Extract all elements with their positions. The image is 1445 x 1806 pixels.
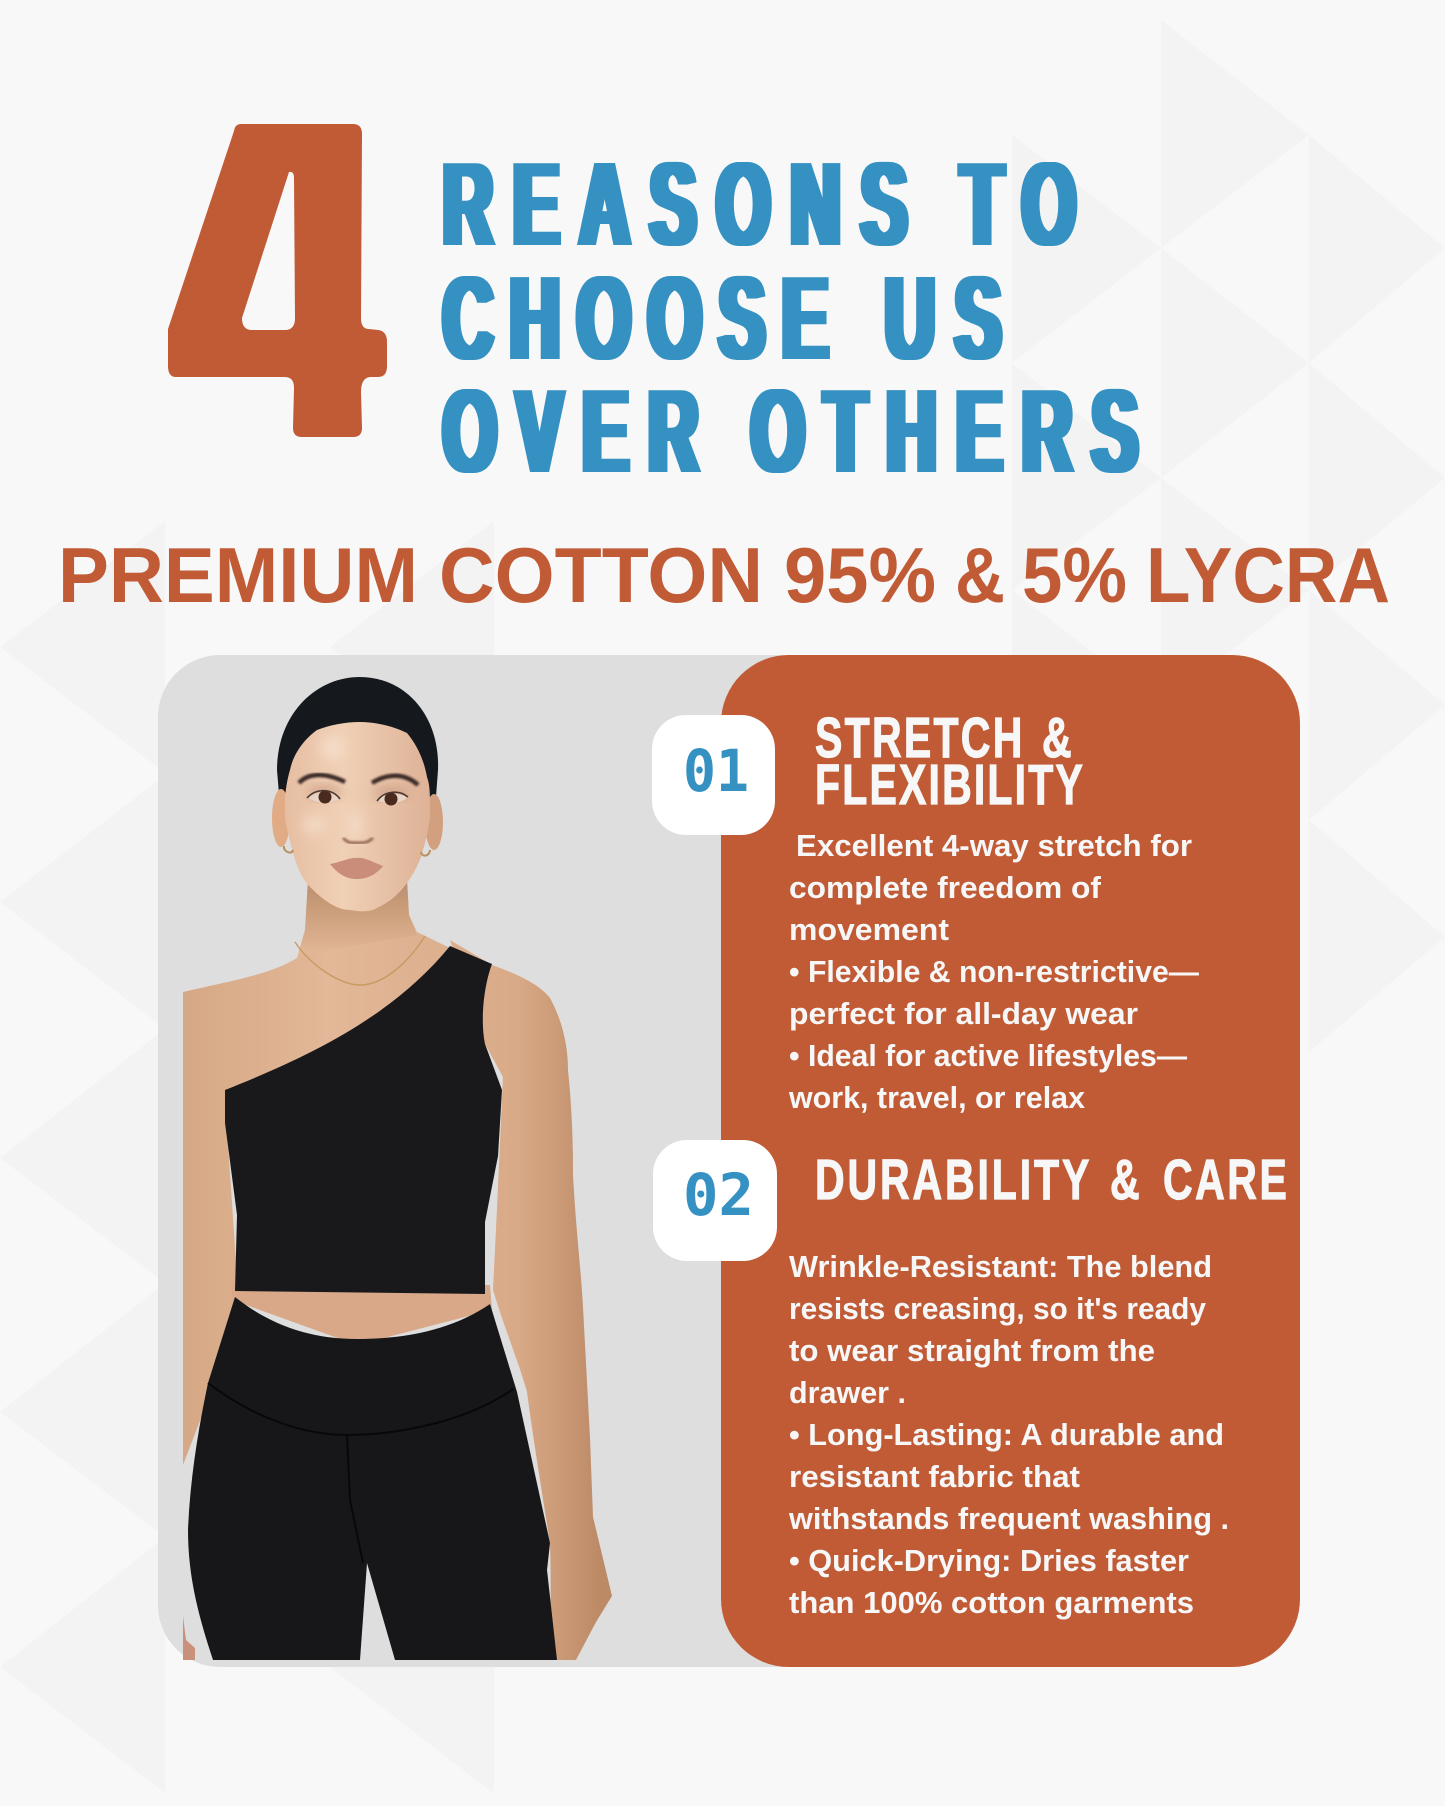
necklace xyxy=(295,936,425,985)
badge 02: 02 xyxy=(683,1161,754,1229)
subtitle: 95% xyxy=(784,531,936,619)
body text: stretch: perfect for all-day wear xyxy=(789,996,1138,1031)
heading: durability and care: & xyxy=(1110,1147,1140,1212)
title: OVER xyxy=(443,364,698,498)
right arm and hand xyxy=(450,940,612,1660)
badge 01: 01 xyxy=(683,737,749,805)
small hand at lower left xyxy=(183,1616,195,1660)
heading: stretch and flexibility: & xyxy=(1042,705,1072,770)
body text: durability: to wear straight from the xyxy=(789,1333,1155,1368)
heading: stretch and flexibility: STRETCH xyxy=(815,705,1022,770)
heading: stretch and flexibility xyxy=(815,705,1083,817)
eyebrows xyxy=(299,775,418,785)
body text: stretch: • Ideal for active lifestyles— xyxy=(789,1038,1187,1073)
body text: durability: drawer . xyxy=(789,1375,906,1410)
left ear xyxy=(272,789,290,847)
model photo illustration xyxy=(183,677,612,1660)
eyes xyxy=(307,790,408,806)
body text: durability: • Long-Lasting: A durable and xyxy=(789,1417,1224,1452)
title xyxy=(443,137,1138,498)
hair xyxy=(277,677,438,810)
subtitle: COTTON xyxy=(439,531,763,619)
heading: stretch and flexibility: FLEXIBILITY xyxy=(815,752,1083,817)
earrings xyxy=(284,846,430,856)
badge 02 xyxy=(653,1140,777,1261)
heading: durability and care: CARE xyxy=(1163,1147,1287,1212)
eye shadow xyxy=(307,787,409,798)
body text: stretch: Excellent 4-way stretch for xyxy=(796,828,1192,863)
title: REASONS xyxy=(443,137,907,271)
heading: durability and care xyxy=(815,1147,1287,1212)
body text: stretch: • Flexible & non-restrictive— xyxy=(789,954,1199,989)
grey image panel xyxy=(158,655,878,1667)
subtitle: LYCRA xyxy=(1146,531,1390,619)
orange content panel xyxy=(652,655,1300,1667)
lips xyxy=(330,858,383,879)
body text: durability: withstands frequent washing . xyxy=(788,1501,1229,1536)
body text: durability: than 100% cotton garments xyxy=(789,1585,1194,1620)
title: OTHERS xyxy=(751,364,1138,498)
heading: durability and care: DURABILITY xyxy=(815,1147,1089,1212)
body text: stretch: movement xyxy=(789,912,949,947)
title: TO xyxy=(961,137,1076,271)
title: US xyxy=(885,251,1001,385)
subtitle xyxy=(58,531,1390,619)
body text: stretch: work, travel, or relax xyxy=(788,1080,1086,1115)
body text: durability: • Quick-Drying: Dries faster xyxy=(789,1543,1189,1578)
subtitle: & xyxy=(955,531,1005,619)
black leggings xyxy=(188,1297,557,1660)
neck shadow xyxy=(298,880,417,955)
subtitle: PREMIUM xyxy=(58,531,418,619)
body text: durability: resists creasing, so it's ready xyxy=(789,1291,1207,1326)
subtitle: 5% xyxy=(1022,531,1127,619)
black one-shoulder top xyxy=(225,946,502,1294)
body text: stretch xyxy=(788,828,1199,1115)
body text: stretch: complete freedom of xyxy=(789,870,1102,905)
body text: durability: resistant fabric that xyxy=(789,1459,1080,1494)
big numeral 4 xyxy=(168,124,387,437)
face xyxy=(285,722,430,911)
skin highlights xyxy=(302,736,362,841)
body text: durability xyxy=(788,1249,1229,1620)
parting line xyxy=(358,685,362,720)
left arm, shoulder and chest xyxy=(183,880,450,1465)
title: CHOOSE xyxy=(443,251,828,385)
waistband seam xyxy=(208,1383,513,1563)
right ear xyxy=(425,794,443,850)
body text: durability: Wrinkle-Resistant: The blend xyxy=(789,1249,1212,1284)
nose xyxy=(343,838,373,843)
midriff xyxy=(232,1285,492,1345)
badge 01 xyxy=(652,715,775,835)
